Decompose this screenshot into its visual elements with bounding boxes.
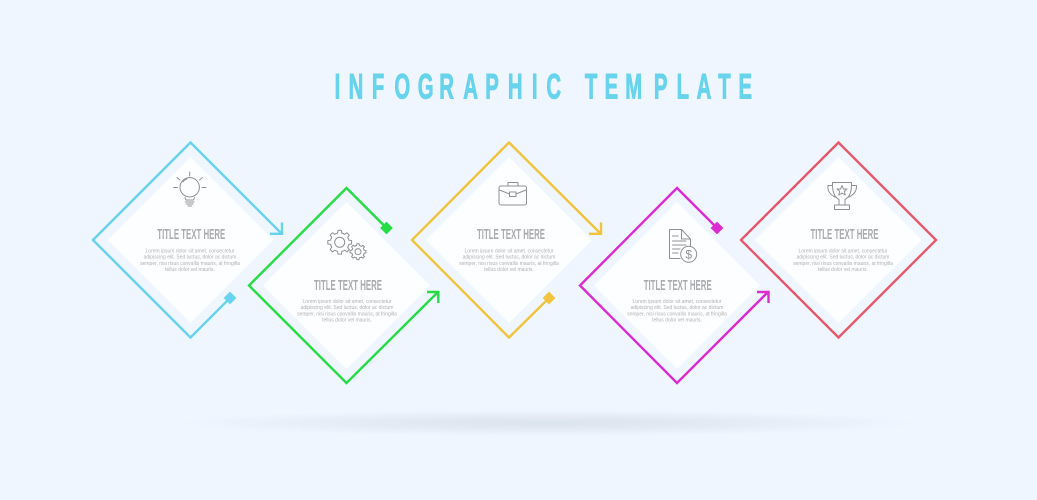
- text block 2: adipiscing elit. Sed luctus, dolor ac dictum: [301, 305, 393, 311]
- text block 3: tellus dolor vel mauris.: [484, 267, 534, 273]
- icon: trophy: [828, 182, 857, 210]
- heading 4: TITLE TEXT HERE: [644, 277, 712, 294]
- white diamond 5: [755, 157, 922, 323]
- white diamond 3: [426, 157, 592, 323]
- title: INFOGRAPHIC TEMPLATE: [335, 68, 752, 107]
- white diamond 2: [263, 202, 430, 369]
- text block 4: semper, nisi risus convallis mauris, at fringilla: [627, 311, 727, 317]
- icon: light bulb: [174, 172, 206, 206]
- text block 2: Lorem ipsum dolor sit amet, consectetur: [303, 299, 392, 305]
- text block 1: adipiscing elit. Sed luctus, dolor ac dictum: [144, 255, 236, 261]
- panel: step 2 process: [249, 188, 438, 383]
- text block 5: Lorem ipsum dolor sit amet, consectetur: [799, 248, 888, 254]
- heading 1: TITLE TEXT HERE: [157, 226, 225, 243]
- panel: step 4 finance: [580, 188, 768, 383]
- text block 4: adipiscing elit. Sed luctus, dolor ac dictum: [631, 305, 723, 311]
- icon: gears: [328, 230, 366, 260]
- text block 2: semper, nisi risus convallis mauris, at fringilla: [297, 311, 397, 317]
- text block 5: tellus dolor vel mauris.: [818, 267, 868, 273]
- text block 3: adipiscing elit. Sed luctus, dolor ac dictum: [463, 255, 555, 261]
- text block 5: semper, nisi risus convallis mauris, at fringilla: [793, 261, 893, 267]
- text block 3: semper, nisi risus convallis mauris, at fringilla: [459, 261, 559, 267]
- marker square 2: [380, 222, 393, 234]
- ground shadow: [173, 410, 923, 436]
- outline with arrow 3: [412, 142, 601, 338]
- marker square 4: [711, 222, 723, 234]
- text block 1: Lorem ipsum dolor sit amet, consectetur: [146, 248, 235, 254]
- text block 1: tellus dolor vel mauris.: [165, 267, 215, 273]
- heading 3: TITLE TEXT HERE: [477, 226, 545, 243]
- text block 5: adipiscing elit. Sed luctus, dolor ac dictum: [797, 255, 889, 261]
- outline with arrow 1: [93, 142, 282, 338]
- panel: step 3 business: [412, 142, 601, 338]
- outline with arrow 4: [580, 188, 768, 383]
- text block 4: Lorem ipsum dolor sit amet, consectetur: [633, 299, 722, 305]
- outline with arrow 2: [249, 188, 438, 383]
- heading 2: TITLE TEXT HERE: [314, 277, 382, 294]
- white diamond 4: [594, 202, 760, 369]
- text block 4: tellus dolor vel mauris.: [652, 318, 702, 324]
- marker square 1: [224, 292, 236, 304]
- text block 3: Lorem ipsum dolor sit amet, consectetur: [465, 248, 554, 254]
- panel: step 5 achievement: [741, 142, 936, 338]
- outline 5: [741, 142, 936, 338]
- panel: step 1 idea: [93, 142, 282, 338]
- text block 2: tellus dolor vel mauris.: [322, 318, 372, 324]
- icon: document with dollar coin: [670, 230, 697, 262]
- heading 5: TITLE TEXT HERE: [810, 226, 878, 243]
- marker square 3: [543, 292, 555, 304]
- white diamond 1: [108, 157, 274, 323]
- text block 1: semper, nisi risus convallis mauris, at fringilla: [140, 261, 240, 267]
- icon: document with dollar coin: $: [685, 248, 692, 262]
- icon: briefcase: [499, 182, 526, 205]
